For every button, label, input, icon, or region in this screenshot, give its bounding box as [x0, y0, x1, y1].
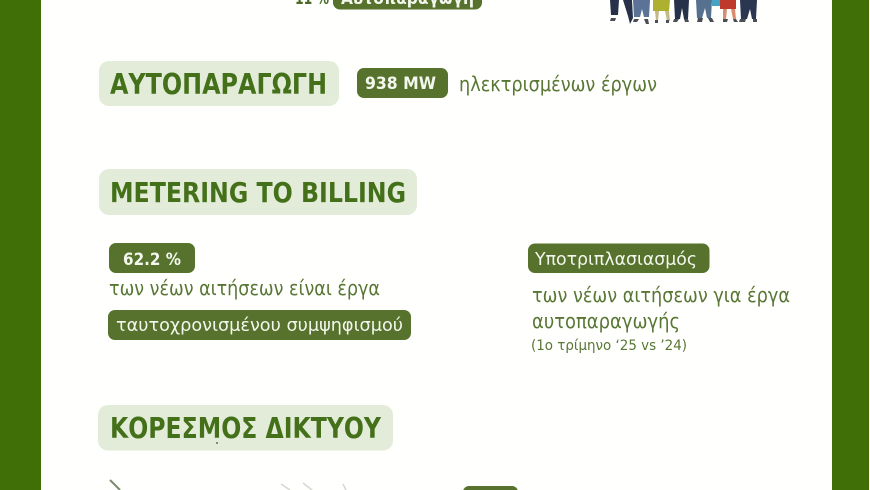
text: new applications share: των νέων αιτήσεων είναι έργα	[109, 276, 380, 300]
heading: grid saturation	[98, 405, 393, 450]
section: grid saturation	[98, 405, 518, 490]
section: metering to billing	[99, 169, 790, 354]
badge: threefold decrease	[528, 244, 710, 273]
icon: wind turbine blades (cropped)	[110, 480, 346, 490]
left green side band	[0, 0, 41, 490]
heading: self-production	[99, 61, 339, 106]
heading: grid saturation: ΚΟΡΕΣΜΟΣ ΔΙΚΤΥΟΥ	[110, 412, 382, 445]
badge: threefold decrease: Υποτριπλασιασμός	[534, 249, 697, 270]
top stat: 11% self-production (cropped)	[295, 0, 482, 10]
stat badge: 62.2%: 62.2 %	[123, 250, 181, 270]
stat badge: 938 MW: 938 MW	[365, 74, 436, 94]
icon: group of people (legs, cropped)	[610, 0, 757, 24]
text: energised projects: ηλεκτρισμένων έργων	[459, 72, 657, 96]
section: self-production	[99, 61, 657, 106]
text: self-production applications	[531, 283, 790, 354]
heading: metering to billing	[99, 169, 417, 215]
right green side band	[832, 0, 869, 490]
heading: metering to billing: METERING TO BILLING	[110, 176, 406, 209]
heading: self-production: ΑΥΤΟΠΑΡΑΓΩΓΗ	[110, 68, 327, 101]
stat badge: 938 MW	[357, 68, 448, 98]
stat badge (cropped)	[463, 486, 518, 490]
text: self-production applications: αυτοπαραγωγής	[532, 309, 680, 333]
text: self-production applications: (1ο τρίμηνο ‘25 vs ’24)	[531, 338, 687, 354]
badge: simultaneous netting	[108, 310, 411, 340]
text: self-production applications: των νέων αιτήσεων για έργα	[532, 283, 790, 307]
stat badge: 62.2%	[109, 243, 195, 273]
badge: simultaneous netting: ταυτοχρονισμένου συμψηφισμού	[116, 315, 403, 336]
